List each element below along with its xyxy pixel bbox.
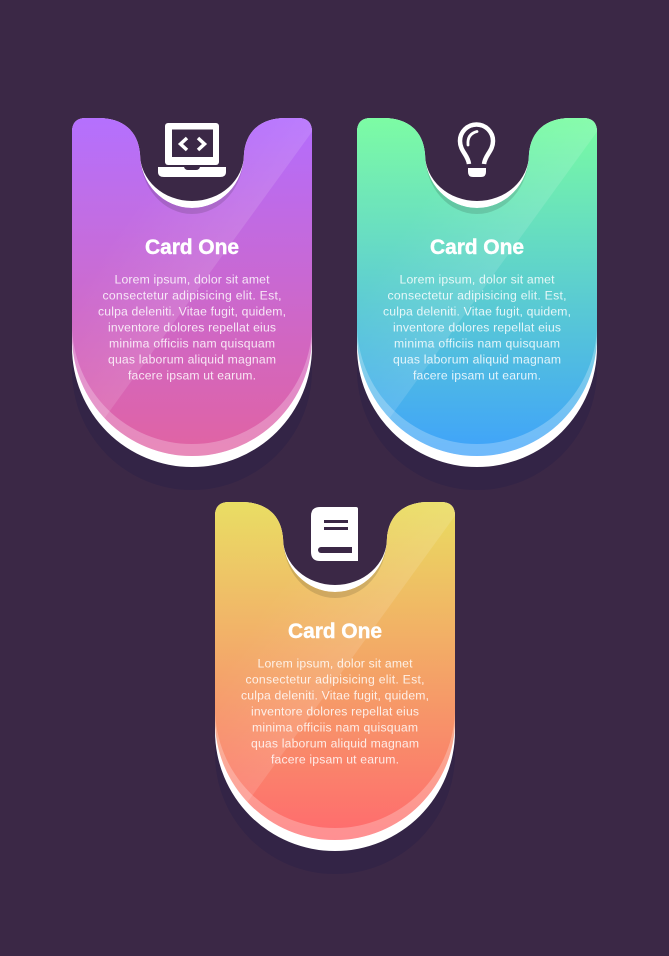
body text: facere ipsam ut earum.	[128, 368, 256, 382]
heading: Card One	[430, 236, 524, 259]
body text: minima officiis nam quisquam	[394, 336, 560, 350]
notch shadow	[140, 154, 244, 214]
body text: culpa deleniti. Vitae fugit, quidem,	[98, 304, 286, 318]
body text: Lorem ipsum, dolor sit amet	[114, 272, 270, 286]
body text: facere ipsam ut earum.	[271, 752, 399, 766]
diagonal gloss	[358, 118, 597, 418]
card: green bulb	[357, 118, 607, 490]
body text: quas laborum aliquid magnam	[251, 736, 419, 750]
card shadow	[215, 525, 455, 874]
card: orange book	[215, 502, 465, 874]
card: purple laptop	[72, 118, 322, 490]
card shadow	[357, 141, 597, 490]
diagonal gloss	[76, 118, 312, 418]
card white base	[72, 118, 312, 467]
card gradient face	[215, 502, 455, 828]
card gradient face	[357, 118, 597, 444]
body text	[383, 272, 571, 382]
diagonal gloss	[218, 502, 455, 802]
body text: minima officiis nam quisquam	[109, 336, 275, 350]
body text: culpa deleniti. Vitae fugit, quidem,	[241, 688, 429, 702]
body text	[98, 272, 286, 382]
heading: Card One	[145, 236, 239, 259]
body text: inventore dolores repellat eius	[108, 320, 276, 334]
body text	[241, 656, 429, 766]
heading: Card One	[288, 620, 382, 643]
notch shadow	[425, 154, 529, 214]
body text: quas laborum aliquid magnam	[393, 352, 561, 366]
card shadow	[72, 141, 312, 490]
icon: light bulb	[460, 125, 493, 177]
notch shadow	[283, 538, 387, 598]
card white base	[357, 118, 597, 467]
body text: consectetur adipisicing elit. Est,	[102, 288, 282, 302]
body text: culpa deleniti. Vitae fugit, quidem,	[383, 304, 571, 318]
body text: minima officiis nam quisquam	[252, 720, 418, 734]
card rim band	[357, 118, 597, 456]
body text: consectetur adipisicing elit. Est,	[388, 288, 566, 302]
body text: consectetur adipisicing elit. Est,	[246, 672, 424, 686]
body text: quas laborum aliquid magnam	[108, 352, 276, 366]
card rim band	[215, 502, 455, 840]
body text: Lorem ipsum, dolor sit amet	[400, 272, 555, 286]
icon: book	[311, 507, 358, 561]
card rim band	[72, 118, 312, 456]
card white base	[215, 502, 455, 851]
card gradient face	[72, 118, 312, 444]
body text: facere ipsam ut earum.	[413, 368, 541, 382]
body text: inventore dolores repellat eius	[393, 320, 561, 334]
body text: inventore dolores repellat eius	[251, 704, 419, 718]
body text: Lorem ipsum, dolor sit amet	[258, 656, 413, 670]
icon: laptop	[158, 123, 226, 177]
